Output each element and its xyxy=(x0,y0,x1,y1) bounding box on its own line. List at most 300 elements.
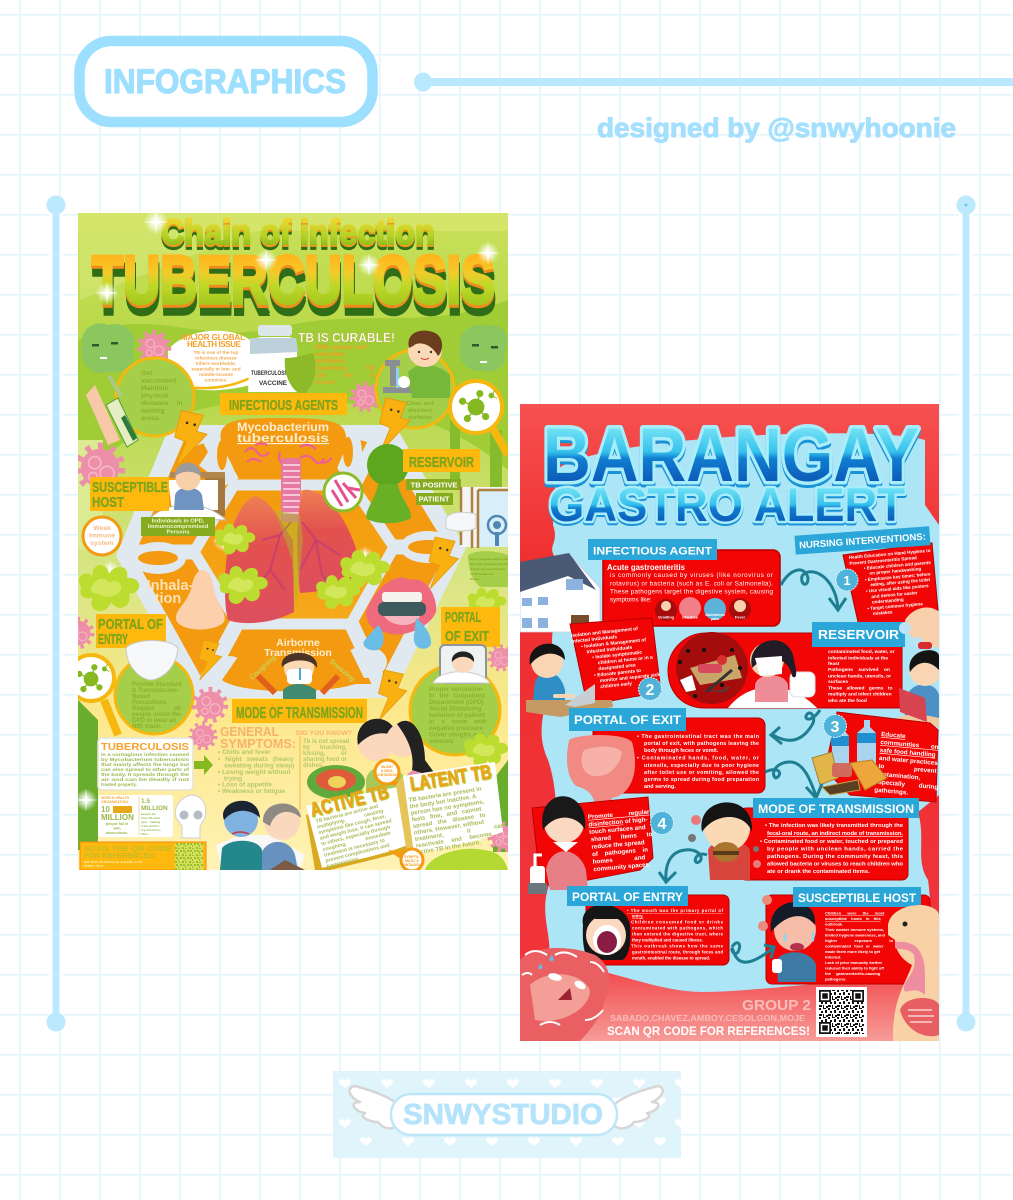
panel: portal of entry: they multiplied and caused illness. xyxy=(632,938,703,942)
panel: entry prevention circle: Precautions xyxy=(132,700,167,706)
illustration: house xyxy=(520,553,600,632)
panel: portal of entry xyxy=(586,895,729,965)
panel: portal of exit: portal of exit, with pathogens leaving the xyxy=(644,741,759,747)
title: BARANGAY: BARANGAY xyxy=(543,413,919,498)
card: WHO statistics: year - making xyxy=(141,820,161,824)
panel: prevention circle (vaccination): physical xyxy=(141,392,168,400)
panel: intervention 4: disinfection of high- xyxy=(588,816,648,828)
panel: portal of exit: and serving. xyxy=(644,784,676,790)
card: tuberculosis definition: TUBERCULOSIS xyxy=(101,741,189,753)
designer credit: designed by @snwyhoonie xyxy=(597,113,956,143)
icon: tubercle bacilli in circle xyxy=(324,473,362,511)
logo text: SNWYSTUDIO xyxy=(403,1099,603,1131)
panel: intervention 4: Promote regular xyxy=(588,809,650,821)
icon: hanging mask xyxy=(446,512,476,531)
sick girl in bed xyxy=(728,640,817,708)
panel: exit prevention circle: negative pressure xyxy=(429,725,483,732)
text: group 2: GROUP 2 xyxy=(742,997,811,1014)
divider line xyxy=(299,736,301,810)
panel: infectious agent: Acute gastroenteritis xyxy=(607,563,686,572)
callout: major global health issue: middle-income xyxy=(199,372,233,378)
text: did you know: Tb is not spread xyxy=(303,739,350,745)
label: susceptible host: HOST xyxy=(92,495,124,511)
icon: open mouth with tears xyxy=(363,578,436,650)
callout: silent and non-contagious: SILENT xyxy=(381,765,394,769)
label: individuals in OPD xyxy=(141,517,215,536)
illustration: girl with sanitizer xyxy=(528,796,588,894)
title: TUBERCULOSIS: TUBERCULOSIS xyxy=(92,242,495,318)
icon: green germ left xyxy=(81,323,134,373)
panel: mycobacterium tuberculosis: tuberculosis xyxy=(237,433,329,445)
label: infectious agents xyxy=(220,393,347,415)
panel: ventilation note xyxy=(468,551,508,587)
panel: reservoir: unclean hands, utensils, or xyxy=(828,674,891,680)
label: TB positive patient: TB POSITIVE xyxy=(411,480,457,490)
badge: 2: 2 xyxy=(646,682,655,699)
panel: susceptible host: outbreak. xyxy=(825,922,843,926)
panel: reservoir: These allowed germs to xyxy=(828,686,892,692)
panel: portal of exit: germs to spread during food preparation xyxy=(644,777,759,783)
icon: slime right xyxy=(468,588,506,617)
icon: bolt with face xyxy=(429,537,458,589)
card: tuberculosis definition: can also spread to other parts of xyxy=(101,767,190,772)
label: portal of exit xyxy=(569,708,686,731)
panel: scan QR code references: SCAN THE QR CODE xyxy=(84,844,172,853)
panel: open book - latent TB: treatment, it can xyxy=(415,823,505,843)
icon: bolt with face xyxy=(378,670,407,720)
callout: silent and non-contagious xyxy=(375,760,408,786)
panel: infectious agent xyxy=(603,550,780,626)
panel: intervention 4: homes and xyxy=(592,854,646,866)
poster: Tuberculosis chain of infection xyxy=(64,209,516,872)
text: general symptoms: • Loss of appetite xyxy=(218,782,272,788)
card: WHO statistics: MILLION xyxy=(101,813,134,822)
icon: green arrow xyxy=(194,755,213,775)
icon: bolt with face xyxy=(175,410,207,468)
illustration: boy eating burger xyxy=(688,802,761,880)
panel: infectious agent: symptoms like: xyxy=(610,596,652,604)
panel: exit prevention circle: Proper ventilation xyxy=(429,686,483,693)
panel: mycobacterium tuberculosis: Mycobacterium xyxy=(237,422,329,434)
callout: symptomatic and contagious: SYMPTO- xyxy=(404,855,420,859)
card: WHO statistics: WORLD HEALTH xyxy=(101,796,130,800)
panel: scan QR code references: BSP NUR 102 ARCOLAS, GALENA, ILAO, xyxy=(84,860,143,864)
panel: reservoir: infected individuals at the xyxy=(828,656,888,662)
panel: isolation intervention 2: • Isolate symptomatic xyxy=(592,650,643,661)
label: infectious agent xyxy=(588,539,717,560)
label: portal of entry: PORTAL OF xyxy=(98,617,163,633)
illustration: sick man and elderly man xyxy=(216,801,305,870)
label: individuals in OPD: Individuals in OPD, xyxy=(152,518,205,524)
text: did you know: dishes. xyxy=(303,763,324,769)
text: general symptoms: • Weakness or fatigue xyxy=(218,788,286,795)
panel: open book - active TB: ACTIVE TB xyxy=(308,781,391,822)
panel: infectious agent: These pathogens target the digestive system, causing xyxy=(610,588,773,596)
text: inhalation: tion xyxy=(155,591,181,607)
icon: green shield xyxy=(285,353,316,395)
icon: molecules magnifier xyxy=(450,381,508,455)
right rail xyxy=(956,196,976,1032)
hexagon ribbon chain xyxy=(116,425,466,698)
label: individuals in OPD: Persons xyxy=(167,530,189,536)
label: TB positive patient: PATIENT xyxy=(419,494,450,504)
symptom icons: Vomiting xyxy=(658,616,675,620)
card: tuberculosis definition xyxy=(98,738,193,790)
callout: weak immune system: Weak xyxy=(93,525,111,532)
text: general symptoms: • Night sweats (heavy xyxy=(218,756,294,763)
panel: open book - latent TB: person has no symptoms, xyxy=(410,799,485,817)
panel: ventilation note: Open the windows and fans to xyxy=(470,562,514,566)
label: mode of transmission xyxy=(753,798,919,818)
panel: exit prevention circle: Cover coughs and xyxy=(429,732,484,738)
panel: open book - active TB: coughing. Immediate xyxy=(322,830,391,853)
text: scan QR code: SCAN QR CODE FOR REFERENCES! xyxy=(607,1024,810,1038)
poster: Barangay Gastro Alert xyxy=(520,404,943,1041)
panel: isolation intervention 2: designated area xyxy=(598,662,636,672)
icon: pink virus xyxy=(64,619,92,647)
illustration: girl with open mouth xyxy=(583,905,631,960)
illustration: digestive system body xyxy=(888,905,939,1041)
panel: isolation intervention 2: • Isolation & Management of xyxy=(581,637,647,650)
card: WHO statistics: with xyxy=(112,826,121,830)
card: WHO statistics: it the world's xyxy=(141,824,160,828)
panel: exit prevention circle: Department (OPD) xyxy=(429,699,484,706)
label: mode of transmission: MODE OF TRANSMISSION xyxy=(758,804,914,816)
card: WHO statistics: from TB each xyxy=(141,816,160,820)
panel: open book - latent TB xyxy=(396,761,507,860)
icon: slime on lungs xyxy=(215,524,390,609)
panel: airborne transmission: Transmission xyxy=(264,647,332,659)
label: TB positive patient xyxy=(406,479,461,505)
card: tuberculosis definition: by Mycobacterium tuberculosis xyxy=(101,757,190,762)
illustration: patient in isolation bed xyxy=(433,645,490,683)
panel: entry prevention circle: N95 mask. xyxy=(132,724,162,730)
panel: susceptible host: infected. xyxy=(825,954,841,960)
header badge: INFOGRAPHICS xyxy=(80,41,372,122)
label: nursing interventions xyxy=(794,526,930,555)
icon: nose xyxy=(176,570,225,630)
label: nursing interventions: NURSING INTERVENTIONS: xyxy=(799,532,926,551)
label: susceptible host xyxy=(793,887,921,907)
callout: symptomatic and contagious: CONTAGIOUS xyxy=(401,863,424,867)
text: did you know: DID YOU KNOW? xyxy=(296,730,352,737)
label: susceptible host: SUSCEPTIBLE HOST xyxy=(798,893,916,905)
callout: TB is curable: With proper and xyxy=(315,344,367,351)
panel: ventilation note: the air. xyxy=(470,577,480,581)
panel: susceptible host: reduced their ability to fight off xyxy=(825,966,885,970)
label: mode of transmission xyxy=(232,699,367,723)
panel: prevention circle (vaccination): vaccinated xyxy=(141,378,176,384)
text: general symptoms: • Chills and fever xyxy=(218,749,271,756)
panel: entry prevention circle: Require all xyxy=(132,706,181,712)
card: WHO statistics: ORGANIZATION xyxy=(101,800,128,804)
panel: exit prevention circle: sneezes xyxy=(429,738,454,745)
title: GASTRO ALERT: GASTRO ALERT xyxy=(549,478,905,531)
panel: portal of entry: • Children consumed food or drinks xyxy=(627,920,724,924)
icon: bolt with face xyxy=(199,640,222,680)
text: general symptoms: GENERAL xyxy=(220,724,279,739)
callout: TB is curable xyxy=(298,331,395,386)
icon: bolt with face xyxy=(380,398,410,452)
panel: open book - active TB: multiplying, causing xyxy=(316,808,384,831)
icon: washing hands with bubbles xyxy=(899,607,939,648)
panel: portal of entry: • The mouth was the primary portal of xyxy=(627,908,724,913)
panel: scan QR code references: FOR REFERENCES! xyxy=(84,851,156,860)
callout: silent and non-contagious: CONTAGIOUS xyxy=(376,773,399,777)
panel: nursing intervention 1: Health Education on Hand Hygiene to xyxy=(849,548,931,560)
icon: water bottles and canned food xyxy=(812,720,887,795)
panel: intervention 3: and water practices xyxy=(879,755,938,767)
label: individuals in OPD: Immunocompromised xyxy=(148,524,209,530)
panel: intervention 4: of pathogens in xyxy=(592,846,649,858)
panel: scan QR code references: PEREZ, VALE xyxy=(84,864,103,868)
panel: isolation intervention 2: Infected Individuals xyxy=(586,645,633,655)
panel: entry prevention circle: Based xyxy=(132,694,150,700)
panel: entry prevention circle: people inside the xyxy=(132,712,182,718)
card: tuberculosis definition: that mainly affects the lungs but xyxy=(101,762,190,767)
panel: nursing intervention 1: mistakes xyxy=(873,609,893,616)
card: WHO statistics: people fall ill xyxy=(106,822,128,826)
text: did you know xyxy=(296,730,352,769)
header badge: INFOGRAPHICS: INFOGRAPHICS xyxy=(104,63,346,101)
callout: TB is curable: cured. xyxy=(315,379,336,386)
panel: portal of entry: contaminated with pathogens, which xyxy=(632,926,723,930)
illustration: elderly patient in bed xyxy=(150,463,226,520)
panel: clean and disinfect circle: disinfect xyxy=(408,408,432,414)
callout: major global health issue: infectious disease xyxy=(195,356,237,362)
badge: 1 xyxy=(836,569,858,591)
panel: portal of entry: • This outbreak shows how the same xyxy=(627,944,724,948)
panel: portal of exit xyxy=(593,718,765,793)
panel: reservoir: surfaces xyxy=(828,679,848,685)
panel: intervention 3: especially during xyxy=(875,779,939,791)
curly arrow: agent to nursing xyxy=(781,570,846,610)
panel: entry prevention circle xyxy=(115,640,193,734)
panel: susceptible host: Children were the most xyxy=(825,910,885,916)
panel: isolation intervention 2: children early xyxy=(600,681,633,690)
card: WHO statistics: MILLION xyxy=(141,805,168,812)
callout: TB is curable: antibiotic xyxy=(315,358,345,365)
panel: nursing intervention 1: • Emphasize key times: before xyxy=(865,571,931,582)
panel: susceptible host: Their weaker immune systems, xyxy=(825,927,884,932)
panel: prevention circle (vaccination): Get xyxy=(141,370,153,377)
text: did you know: kissing, or xyxy=(303,751,348,757)
panel: open book - active TB: treatment is necessary to xyxy=(323,838,386,859)
panel: isolation intervention 2: Isolation and Management of xyxy=(571,626,639,639)
panel: mode of transmission: allowed bacteria or viruses to reach children who xyxy=(767,862,903,868)
panel: clean and disinfect circle: Clean and xyxy=(406,401,434,407)
panel: exit prevention circle: Isolation of patient xyxy=(429,712,486,719)
panel: mode of transmission: • Contaminated food or water, touched or prepared xyxy=(760,839,903,845)
callout: major global health issue: MAJOR GLOBAL xyxy=(181,333,245,342)
text: general symptoms xyxy=(218,724,296,795)
panel: open book - latent TB: feels fine, and cannot xyxy=(411,807,482,824)
icon: pink virus xyxy=(490,824,516,850)
text: general symptoms: • Losing weight without xyxy=(218,769,292,776)
callout: major global health issue: HEALTH ISSUE xyxy=(187,340,242,349)
wing left xyxy=(350,1086,401,1128)
panel: susceptible host: the gastroenteritis-causing xyxy=(825,971,881,976)
panel: open book - active TB xyxy=(306,781,412,870)
label: portal of exit: OF EXIT xyxy=(445,629,489,645)
panel: isolation intervention 2 xyxy=(570,618,661,702)
panel: intervention 3: communities on xyxy=(880,739,939,751)
text: general symptoms: SYMPTOMS: xyxy=(220,736,296,751)
icon: molecules magnifier xyxy=(68,655,118,735)
panel: open book - latent TB: LATENT TB xyxy=(408,761,493,796)
panel: portal of exit: • The gastrointestinal tract was the main xyxy=(637,734,759,740)
panel: open book - active TB: transmission. xyxy=(326,856,361,870)
badge: 4 xyxy=(650,812,674,834)
label: mode of transmission: MODE OF TRANSMISSION xyxy=(236,705,363,722)
panel: portal of exit: • Contaminated hands, food, water, or xyxy=(637,756,760,762)
callout: weak immune system xyxy=(83,517,121,555)
panel: susceptible host: limited hygiene awareness, and xyxy=(825,932,886,938)
symptom icons: Diarrhea xyxy=(682,616,699,620)
panel: nursing intervention 1: understanding xyxy=(872,597,904,605)
panel: mode of transmission: • The infection was likely transmitted through the xyxy=(765,823,904,829)
logo pill xyxy=(391,1094,617,1135)
icon: vaccine bottle: VACCINE xyxy=(259,381,287,387)
icon: lungs xyxy=(225,458,359,623)
icon: pink virus xyxy=(139,332,169,362)
panel: intervention 4: community spaces. xyxy=(593,861,651,873)
panel: nursing intervention 1: • Target common hygiene xyxy=(867,601,923,611)
panel: airborne transmission: Sneezing xyxy=(328,658,356,683)
panel: portal of entry: gastrointestinal route, through feces and xyxy=(632,950,723,954)
light blue wavy backdrop xyxy=(542,433,939,992)
illustration: sick boy with fever xyxy=(758,895,816,982)
label: portal of exit: PORTAL OF EXIT xyxy=(574,713,682,727)
panel: nursing intervention 1: eating, after using the toilet xyxy=(870,577,931,587)
panel: reservoir: Pathogens survived on xyxy=(828,667,890,673)
icon: open window and fan xyxy=(461,487,508,548)
badge: 4: 4 xyxy=(658,816,667,833)
panel: open book - latent TB: others. However, without xyxy=(414,820,485,837)
sparkles xyxy=(74,209,500,872)
panel: mode of transmission: fecal-oral route, an indirect mode of transmission. xyxy=(767,831,903,837)
icon: large intestine xyxy=(567,735,635,807)
badge: 3 xyxy=(824,714,846,738)
card: WHO statistics: people die xyxy=(141,812,156,816)
panel: entry prevention circle: OPD to wear an xyxy=(132,718,177,724)
panel: open book - active TB: prevent complications and xyxy=(325,843,390,864)
panel: exit prevention circle: in a room with xyxy=(429,718,487,726)
label: infectious agent: INFECTIOUS AGENT xyxy=(593,546,712,558)
panel: nursing intervention 1: • Educate children and parents xyxy=(864,560,931,571)
panel: airborne transmission: Airborne xyxy=(276,637,320,649)
callout: symptomatic and contagious xyxy=(388,849,424,871)
icon: syringes xyxy=(86,376,138,447)
panel: mycobacterium tuberculosis xyxy=(221,418,346,472)
panel: susceptible host xyxy=(766,895,930,984)
panel: portal of exit: after toilet use or vomiting, allowed the xyxy=(644,770,759,776)
panel: infectious agent: is commonly caused by viruses (like norovirus or xyxy=(610,572,773,579)
symptom icons: pain xyxy=(711,617,720,621)
illustration: sad intestine mascot xyxy=(520,948,609,1041)
panel: prevention circle (vaccination): areas. xyxy=(141,415,161,422)
icon: vaccine bottle xyxy=(248,325,298,392)
icon: slime left xyxy=(79,565,139,611)
label: portal of exit: PORTAL xyxy=(445,610,481,626)
panel: ventilation note: reduce the concentration xyxy=(470,567,506,571)
symptom icons xyxy=(655,597,751,621)
symptom icons: Fever xyxy=(735,616,746,620)
panel: prevention circle (vaccination): waiting xyxy=(140,408,164,414)
knots of the ribbon xyxy=(138,438,404,698)
label: portal of entry: ENTRY xyxy=(98,632,128,648)
contaminated food board xyxy=(676,632,748,704)
panel: nursing intervention 1: • Use visual aids like posters xyxy=(866,583,929,594)
illustration: masked boy sneezing xyxy=(282,653,317,703)
panel: entry prevention circle: & Transmission- xyxy=(132,688,179,694)
panel: intervention 4 xyxy=(532,797,655,887)
panel: nursing intervention 1 xyxy=(843,543,938,625)
curly arrow: reservoir to exit xyxy=(771,710,820,744)
label: susceptible host: SUSCEPTIBLE xyxy=(92,480,168,496)
panel: prevention circle (vaccination): distance in xyxy=(141,400,183,407)
callout: major global health issue: TB is one of the top xyxy=(194,350,238,356)
panel: open book - active TB: TB bacteria are active and xyxy=(315,804,379,825)
text: did you know: by touching, xyxy=(303,745,347,751)
panel: prevention circle (vaccination): Maintain xyxy=(141,385,169,392)
callout: TB is curable: can be fully xyxy=(315,372,385,379)
icon: reservoir person pawn xyxy=(366,444,411,523)
label: portal of entry xyxy=(96,614,166,648)
icon: pink virus xyxy=(489,646,513,670)
label: reservoir: RESERVOIR xyxy=(818,627,900,642)
panel: entry prevention circle: Provide Standard xyxy=(132,682,182,688)
label: reservoir xyxy=(812,622,905,647)
panel: infectious agent: rotavirus) or bacteria (such as E. coli or Salmonella). xyxy=(610,580,773,588)
panel: intervention 4: reduce the spread xyxy=(591,839,645,851)
text: general symptoms: trying xyxy=(224,776,242,782)
panel: airborne transmission: Coughing xyxy=(249,654,278,681)
text: did you know: sharing food or xyxy=(303,757,348,763)
panel: intervention 3: contamination, xyxy=(875,771,921,782)
footer logo: SNWYSTUDIO xyxy=(333,1071,681,1158)
title: Chain of infection: Chain of infection xyxy=(161,213,435,252)
callout: symptomatic and contagious: MATIC & xyxy=(405,859,419,863)
panel: ventilation note: Use a surgical mask to patient xyxy=(470,557,513,561)
callout: major global health issue: killers worldwide, xyxy=(196,361,237,367)
panel: susceptible host: Lack of prior immunity further xyxy=(825,960,883,965)
panel: exit prevention circle: in the Outpatient xyxy=(429,692,486,700)
panel: intervention 3: gatherings. xyxy=(874,787,909,797)
icon: slime bush bottom xyxy=(425,849,508,870)
icon: slime bush right xyxy=(464,733,508,767)
card: tuberculosis definition: treated properly. xyxy=(101,782,137,787)
panel: portal of entry: then entered the digestive tract, where xyxy=(632,932,724,936)
curly arrow: exit to mode xyxy=(765,762,822,798)
label: portal of entry xyxy=(567,886,688,906)
card: WHO statistics: 10 xyxy=(101,805,110,814)
panel: isolation intervention 2: monitor and separate sick xyxy=(599,672,661,684)
icon: pink virus xyxy=(352,384,378,410)
panel: intervention 3: Educate xyxy=(881,731,906,740)
callout: major global health issue: countries. xyxy=(205,378,227,384)
text: group members: SABADO,CHAVEZ,AMBOY,CESOLGON,MOJE xyxy=(610,1014,806,1023)
callout: TB is curable: treatment, TB xyxy=(315,365,375,372)
text: inhalation: Inhala- xyxy=(147,578,194,594)
panel: mode of transmission: ate or drank the contaminated items. xyxy=(767,869,870,875)
badge: 2 xyxy=(638,678,662,700)
badge: 1: 1 xyxy=(843,573,851,588)
card: tuberculosis definition: is a contagious infection caused xyxy=(101,752,189,757)
panel: airborne transmission xyxy=(222,635,365,693)
card: WHO statistics xyxy=(98,795,173,837)
illustration: child reading xyxy=(892,642,941,727)
